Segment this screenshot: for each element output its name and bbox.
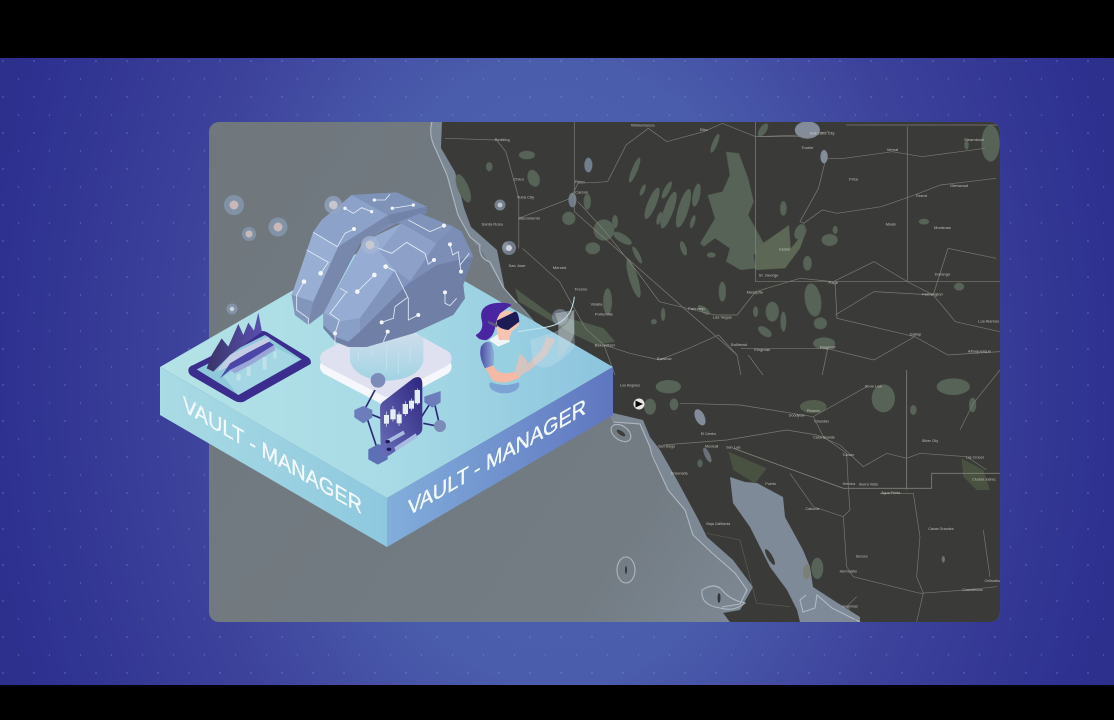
- platform right face: [387, 367, 613, 547]
- top letterbox bar: [0, 0, 1114, 58]
- map labels: Cuauhtémoc: [962, 588, 983, 592]
- hair: [476, 303, 512, 340]
- borders and roads north: [445, 122, 1000, 375]
- map labels: Merced: [553, 265, 566, 270]
- map labels: Puerto: [765, 482, 776, 486]
- map labels: Mesquite: [747, 290, 763, 294]
- map labels: Yuba City: [517, 195, 534, 199]
- map labels: Gallup: [910, 332, 921, 337]
- map labels: Ensenada: [671, 472, 689, 476]
- left lobe: [292, 192, 427, 325]
- candlesticks: [384, 390, 420, 424]
- map labels: Carson: [575, 190, 588, 195]
- circuit traces: [297, 194, 469, 345]
- map labels: Vernal: [887, 147, 898, 152]
- map labels: [482, 123, 1003, 608]
- pedestal with hologram: [328, 327, 443, 397]
- map labels: Ciudad Juárez: [972, 478, 996, 482]
- map labels: Kingman: [754, 347, 770, 352]
- map labels: Grand: [916, 193, 927, 198]
- right lobe: [323, 213, 473, 347]
- map labels: Casas Grandes: [928, 527, 954, 531]
- map labels: San Luis: [726, 446, 741, 450]
- figure with VR headset: [476, 297, 575, 393]
- map labels: Chico: [514, 177, 524, 181]
- play marker: [634, 398, 644, 410]
- collar and face: [489, 333, 510, 347]
- map labels: San Diego: [658, 444, 675, 448]
- card body: [380, 377, 422, 456]
- map labels: Heroica: [843, 482, 856, 486]
- pedestal top: [328, 327, 443, 388]
- map labels: Moab: [886, 222, 896, 227]
- map labels: El Centro: [701, 432, 716, 436]
- map labels: Durango: [935, 272, 950, 277]
- hologram: [350, 332, 423, 381]
- bottom letterbox bar: [0, 685, 1114, 720]
- vr headset: [497, 312, 519, 330]
- southern terrain: [644, 378, 990, 579]
- joint ball: [371, 373, 385, 388]
- terrain and vegetation: [452, 121, 1000, 349]
- coastal shelf: [430, 122, 720, 556]
- arm links: [364, 390, 440, 450]
- waist: [489, 377, 519, 393]
- map labels: Bullhead: [731, 342, 747, 347]
- map labels: Las Cruces: [966, 456, 984, 460]
- map labels: Agua Prieta: [881, 491, 901, 495]
- map labels: Glenwood: [950, 183, 968, 188]
- tablet screen: [197, 335, 302, 395]
- map labels: Goodyear: [789, 414, 805, 418]
- map labels: Flagstaff: [820, 345, 836, 349]
- gulf of california: [730, 477, 860, 622]
- map labels: Salt Lake City: [810, 131, 835, 135]
- map labels: Porterville: [595, 312, 613, 317]
- brain glow nodes: [324, 196, 379, 254]
- map labels: San Jose: [508, 263, 525, 268]
- label: left side: VAULT - MANAGER: [183, 392, 362, 520]
- land: [441, 122, 1000, 622]
- joint cubes: [354, 406, 372, 423]
- map labels: Winnemucca: [631, 123, 655, 127]
- map labels: Redding: [495, 137, 510, 142]
- map labels: Caborca: [805, 507, 820, 511]
- map labels: Pahrump: [688, 306, 705, 311]
- map labels: Tooele: [801, 145, 813, 150]
- map labels: Visalia: [591, 302, 603, 307]
- map labels: Reno: [575, 179, 585, 184]
- map labels: Hermosillo: [840, 570, 857, 574]
- chart ribbon: [220, 342, 274, 378]
- icon: robot trading card: [354, 373, 446, 465]
- area chart peaks: [207, 313, 262, 372]
- map labels: Sonora: [856, 555, 868, 559]
- map labels: Barstow: [657, 356, 672, 361]
- map labels: Las Vegas: [713, 315, 732, 319]
- platform left face: [160, 367, 387, 547]
- map labels: St. George: [759, 273, 778, 278]
- map labels: Elko: [700, 127, 708, 132]
- map labels: Albuquerque: [968, 349, 991, 353]
- panel: map: [209, 121, 1003, 622]
- map labels: Sacramento: [518, 216, 540, 221]
- arm: [486, 365, 520, 383]
- map labels: Casa Grande: [813, 436, 835, 440]
- torso: [485, 332, 522, 385]
- map labels: Los Angeles: [620, 384, 640, 388]
- map labels: Silver City: [922, 439, 938, 443]
- card sliders: [387, 431, 405, 443]
- label: right side: VAULT - MANAGER: [408, 394, 586, 522]
- map labels: Chandler: [814, 420, 830, 424]
- map labels: Bakersfield: [595, 343, 615, 348]
- map labels: Baja California: [706, 522, 731, 526]
- candle bars: [237, 352, 277, 381]
- sea: [209, 122, 1000, 622]
- holographic screen: [518, 297, 574, 332]
- map labels: Farmington: [922, 292, 943, 297]
- islands: [616, 428, 777, 603]
- map labels: Page: [829, 280, 838, 285]
- coastline contours: [431, 122, 860, 622]
- floating data bubbles: [224, 195, 288, 314]
- map labels: Steamboat: [964, 137, 985, 142]
- platform top face: [160, 236, 613, 498]
- sleeve: [480, 342, 494, 368]
- isometric platform: [160, 236, 613, 547]
- forearm behind glass: [515, 337, 556, 377]
- map labels: Cedar: [779, 247, 791, 252]
- map labels: Santa Rosa: [482, 222, 504, 227]
- map labels: Los Alamos: [978, 319, 999, 323]
- icon: circuit brain: [292, 192, 473, 347]
- tablet frame: [188, 331, 311, 402]
- map labels: Tucson: [842, 453, 854, 457]
- map labels: Show Low: [865, 384, 882, 388]
- map labels: Phoenix: [807, 409, 820, 413]
- map labels: Chihuahua: [984, 579, 1003, 583]
- icon: tablet chart: [188, 313, 311, 402]
- map labels: Montrose: [934, 225, 951, 230]
- borders and roads south: [663, 370, 1000, 622]
- map labels: Guaymas: [842, 604, 858, 608]
- map labels: Sierra Vista: [859, 483, 879, 487]
- pedestal base: [328, 333, 443, 397]
- map labels: Price: [849, 177, 858, 181]
- map glow markers: [494, 200, 568, 325]
- map labels: Mexicali: [705, 444, 718, 448]
- map labels: Fresno: [575, 287, 587, 291]
